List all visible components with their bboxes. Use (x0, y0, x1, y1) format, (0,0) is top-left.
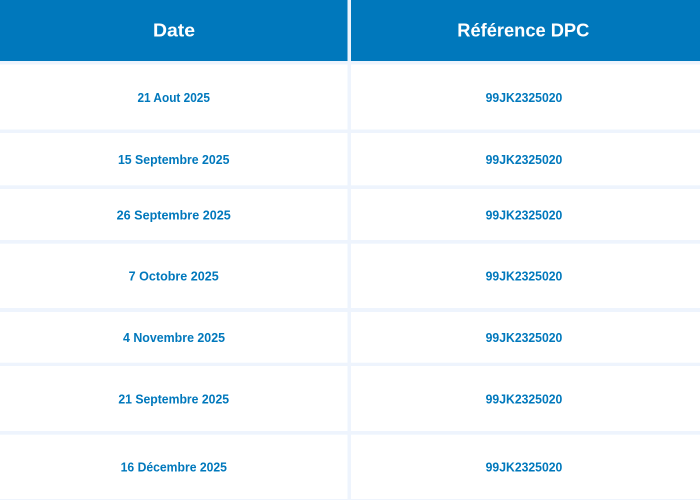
header cell: Date: Date (153, 21, 195, 41)
row 4: 99JK2325020 (486, 269, 562, 283)
row 5 (0, 312, 700, 363)
row 5: 4 Novembre 2025 (123, 331, 225, 345)
header cell: Référence DPC: Référence DPC (457, 21, 589, 41)
row 2 (0, 133, 700, 185)
row 7 (0, 435, 700, 499)
row 6: 99JK2325020 (486, 392, 562, 406)
row 1: 21 Aout 2025 (137, 91, 210, 105)
row 3: 99JK2325020 (486, 208, 562, 222)
row 7: 16 Décembre 2025 (121, 460, 227, 474)
row 2: 99JK2325020 (486, 153, 562, 167)
header row (0, 0, 700, 61)
row 4: 7 Octobre 2025 (129, 269, 219, 283)
row 3: 26 Septembre 2025 (117, 208, 231, 222)
row 4 (0, 244, 700, 308)
row 1 (0, 64, 700, 130)
row 6: 21 Septembre 2025 (118, 392, 229, 406)
row 5: 99JK2325020 (486, 331, 562, 345)
header cell: Référence DPC (351, 0, 700, 61)
row 3 (0, 189, 700, 240)
row 6 (0, 366, 700, 431)
row 2: 15 Septembre 2025 (118, 153, 229, 167)
row 1: 99JK2325020 (486, 91, 562, 105)
header cell: Date (0, 0, 348, 61)
row 7: 99JK2325020 (486, 460, 562, 474)
